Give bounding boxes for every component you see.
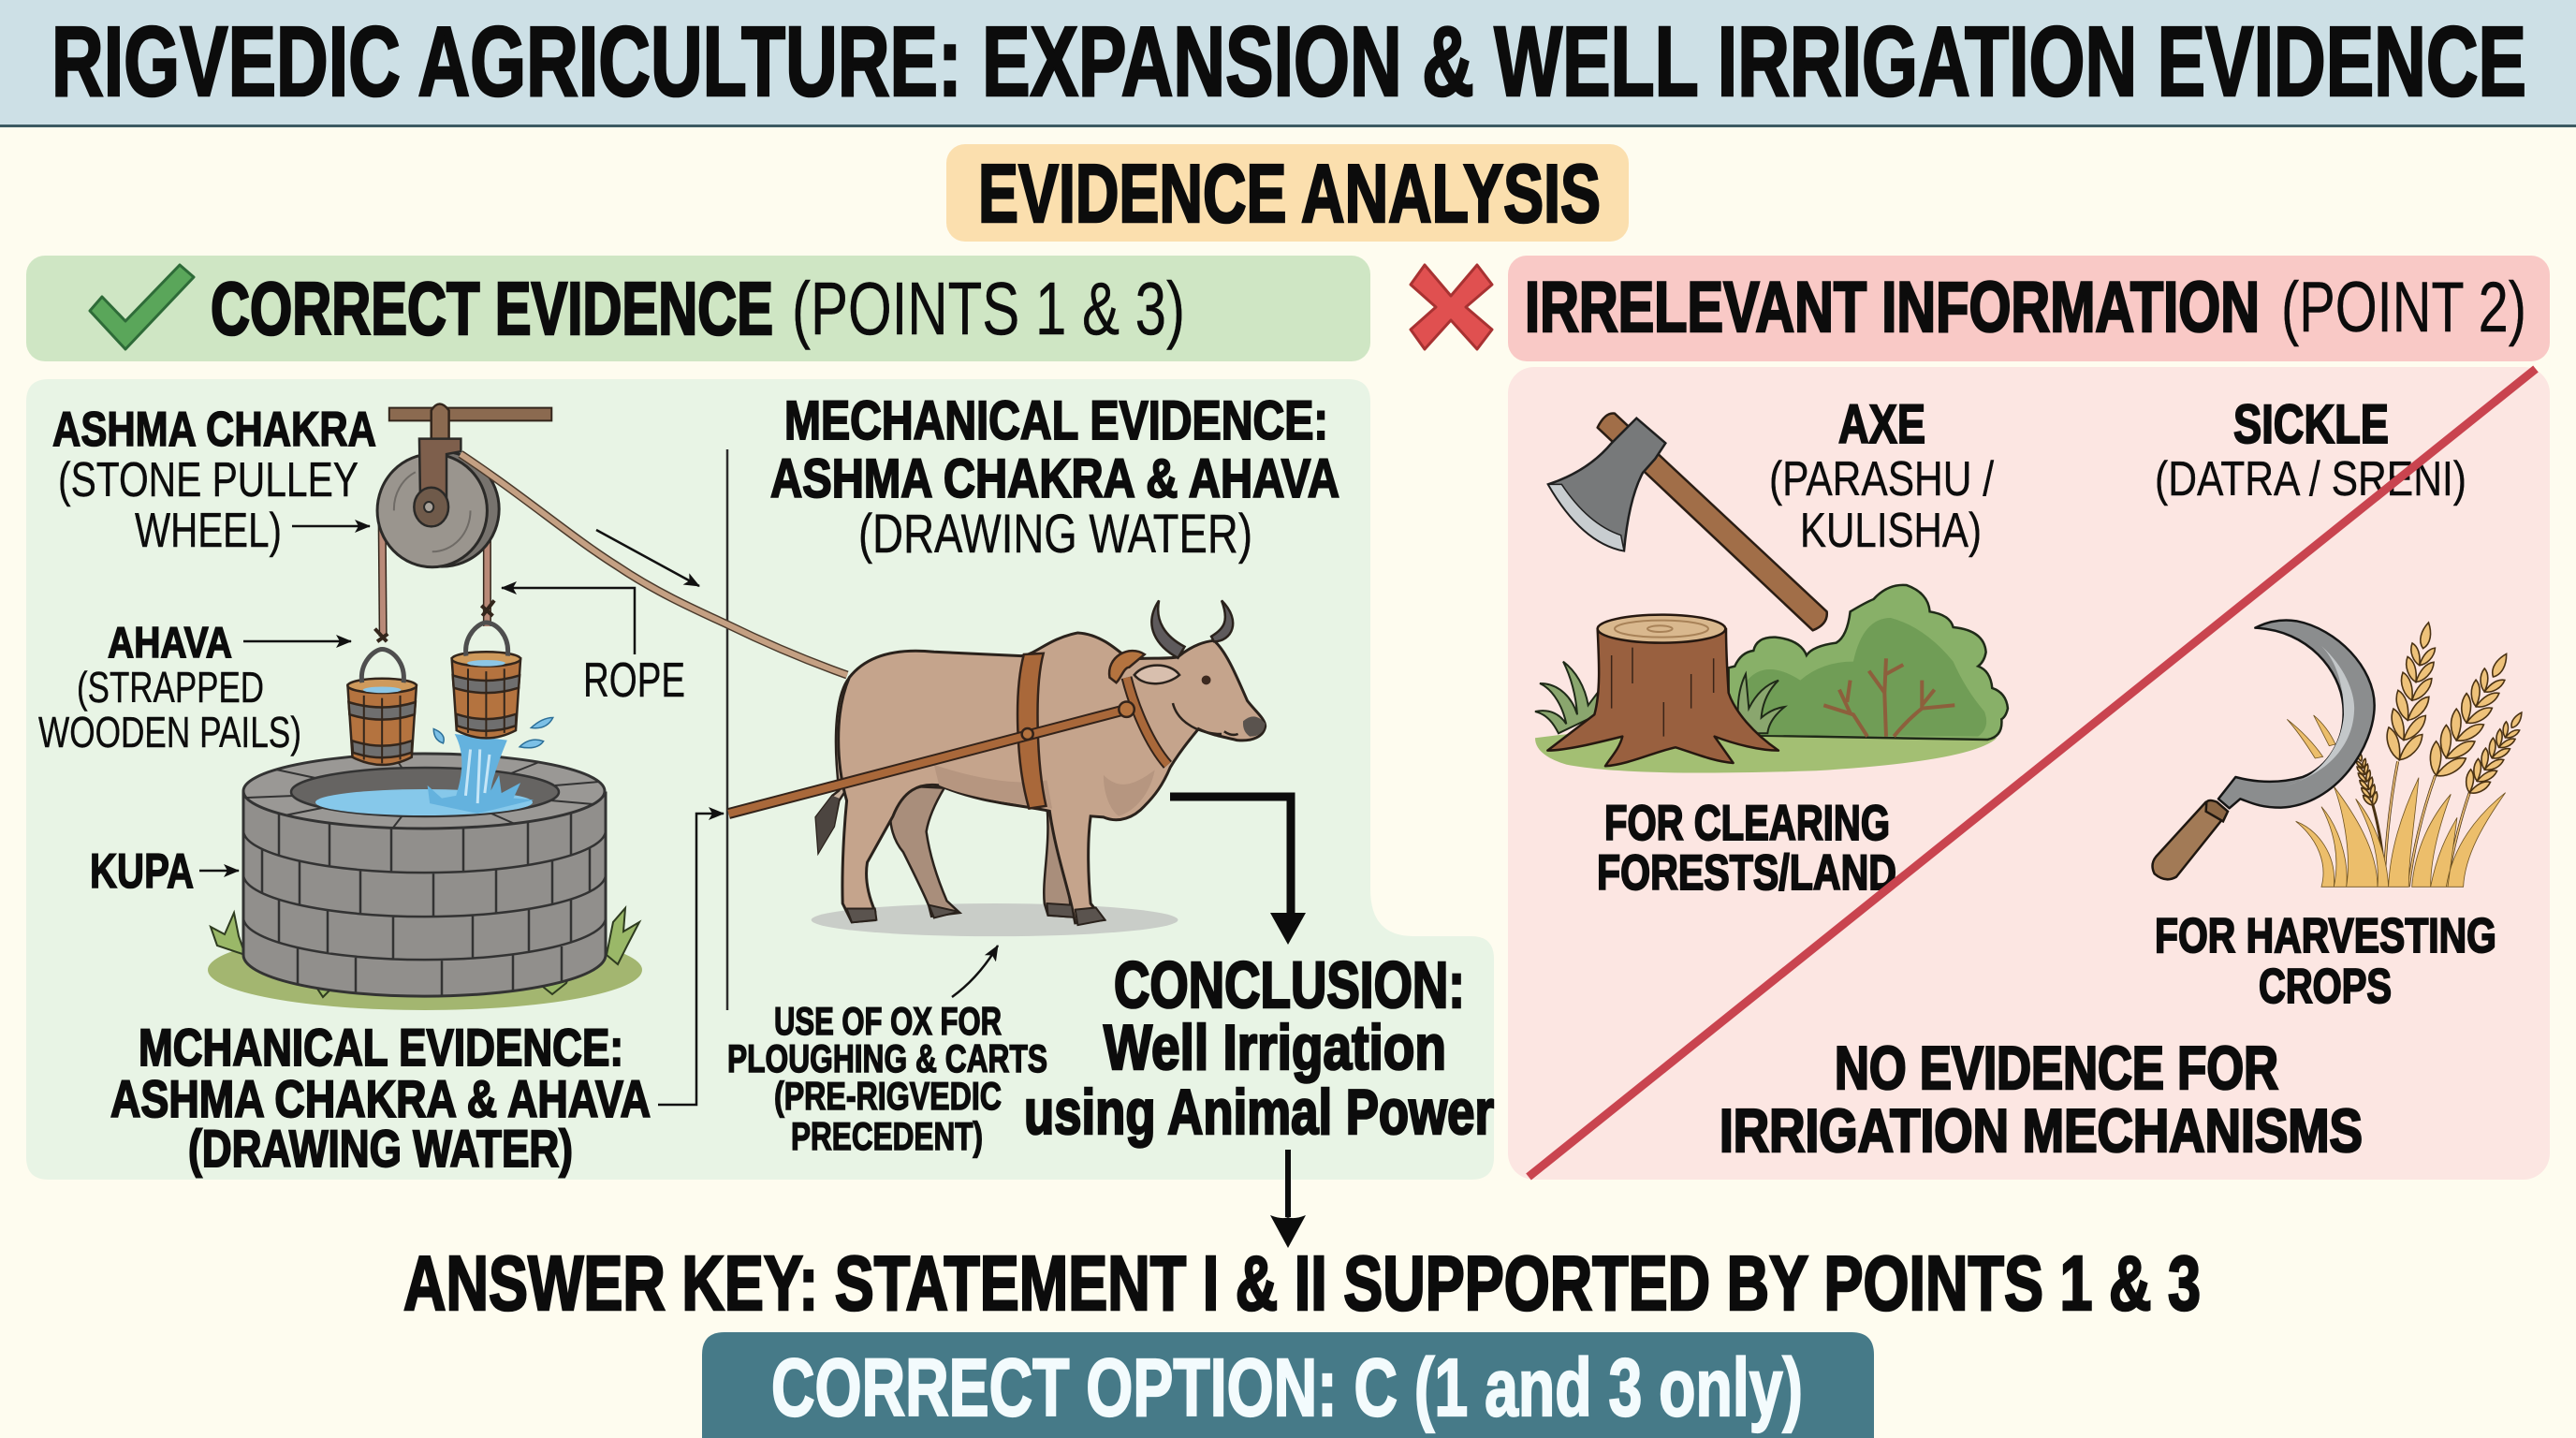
text block: mechanical evidence, right: ASHMA CHAKRA & AHAVA bbox=[770, 448, 1339, 509]
label: sickle: (DATRA / SRENI) bbox=[2155, 452, 2466, 506]
icon: green check mark bbox=[90, 265, 194, 349]
text block: no evidence: NO EVIDENCE FOR bbox=[1835, 1034, 2278, 1102]
water drops bbox=[433, 717, 553, 748]
text block: no evidence: IRRIGATION MECHANISMS bbox=[1720, 1096, 2363, 1165]
rope: right bbox=[483, 529, 491, 626]
text block: conclusion: using Animal Power bbox=[1024, 1077, 1494, 1148]
bucket: left bbox=[347, 650, 417, 765]
heading: evidence analysis: EVIDENCE ANALYSIS bbox=[978, 147, 1601, 240]
illustration: ox bbox=[728, 600, 1266, 936]
text block: use of ox bbox=[727, 999, 1047, 1158]
grass tufts bbox=[1535, 662, 1785, 733]
ox shadow bbox=[812, 903, 1178, 936]
bush bbox=[1729, 585, 2008, 740]
ox tail bbox=[816, 678, 857, 852]
ox collar bbox=[1127, 678, 1167, 765]
divider line bbox=[726, 449, 728, 1010]
wheat leaves bbox=[2287, 715, 2506, 887]
red strike-through line bbox=[1529, 369, 2536, 1177]
caption: for clearing forests bbox=[1597, 796, 1896, 901]
grass tufts bbox=[211, 908, 639, 997]
label: kupa: KUPA bbox=[90, 844, 194, 899]
label: ashma chakra bbox=[52, 403, 376, 558]
arrow: to well bbox=[199, 870, 239, 872]
text block: mechanical evidence, left: MCHANICAL EVIDENCE: bbox=[139, 1018, 623, 1077]
panel header: correct evidence bbox=[26, 256, 1370, 361]
wheat stalks bbox=[2373, 761, 2469, 887]
beam post bbox=[432, 404, 449, 441]
heading text: correct evidence: CORRECT EVIDENCE bbox=[211, 267, 773, 350]
label: axe bbox=[1769, 394, 1994, 558]
arrow: to pulley bbox=[292, 525, 370, 527]
text block: mechanical evidence, right: MECHANICAL EVIDENCE: bbox=[784, 390, 1328, 451]
icon: red cross bbox=[1411, 265, 1492, 349]
caption: for harvesting crops: CROPS bbox=[2259, 960, 2392, 1014]
axe head bbox=[1548, 418, 1665, 550]
caption: for clearing forests: FORESTS/LAND bbox=[1597, 845, 1896, 901]
pulley hub bbox=[414, 488, 448, 526]
label: ashma chakra: WHEEL) bbox=[135, 504, 282, 558]
arrow: conclusion to answer bbox=[1270, 1150, 1306, 1248]
arrow: evidence to pole bbox=[658, 814, 724, 1105]
rope knots bbox=[375, 600, 494, 641]
label: ahava: AHAVA bbox=[108, 618, 232, 667]
ox girth strap bbox=[1017, 653, 1046, 809]
ox belly shade bbox=[934, 765, 1155, 816]
text block: no evidence bbox=[1720, 1034, 2363, 1165]
label: axe: AXE bbox=[1838, 394, 1925, 455]
heading text: points 1 and 3: (POINTS 1 & 3) bbox=[792, 267, 1185, 350]
ox horns bbox=[1151, 600, 1233, 658]
text block: conclusion: Well Irrigation bbox=[1104, 1012, 1446, 1083]
illustration: sickle and wheat bbox=[2153, 619, 2531, 887]
label: ashma chakra: ASHMA CHAKRA bbox=[52, 403, 376, 457]
sickle handle bbox=[2153, 802, 2226, 879]
text block: mechanical evidence, left: (DRAWING WATER) bbox=[188, 1119, 573, 1178]
ox hooves bbox=[847, 903, 1105, 925]
text block: conclusion: CONCLUSION: bbox=[1114, 948, 1465, 1021]
pulley bracket bbox=[419, 439, 461, 498]
pulley back wheel bbox=[385, 451, 499, 566]
label: ahava: (STRAPPED bbox=[77, 663, 264, 712]
panel header: irrelevant information bbox=[1508, 256, 2550, 361]
well rim bbox=[243, 754, 605, 829]
arrow: to rope bbox=[502, 588, 635, 654]
heading text: irrelevant information: IRRELEVANT INFORMATION bbox=[1525, 268, 2260, 347]
tree stump bbox=[1547, 629, 1778, 766]
arrow: rope direction bbox=[596, 530, 699, 586]
correct option box: CORRECT OPTION: C (1 and 3 only) bbox=[771, 1343, 1803, 1433]
illustration: stone well (kupa) bbox=[208, 754, 642, 1010]
water in well bbox=[315, 789, 533, 815]
ox far hind leg bbox=[890, 785, 959, 917]
well opening bbox=[291, 768, 559, 816]
ox body bbox=[839, 633, 1266, 923]
text block: use of ox: PRECEDENT) bbox=[791, 1114, 983, 1158]
harness pole bbox=[728, 710, 1127, 814]
label: sickle: SICKLE bbox=[2233, 394, 2389, 455]
label: ahava bbox=[38, 618, 301, 756]
text block: mechanical evidence, left: ASHMA CHAKRA & AHAVA bbox=[110, 1069, 651, 1128]
ox eye bbox=[1202, 675, 1211, 684]
title banner bbox=[0, 0, 2576, 127]
main rope to ox bbox=[461, 454, 847, 675]
ox far front leg bbox=[1044, 806, 1073, 917]
panel: irrelevant information body bbox=[1508, 367, 2550, 1180]
axe handle bbox=[1598, 414, 1827, 630]
sickle blade bbox=[2218, 621, 2375, 808]
brick courses bbox=[243, 811, 606, 996]
text block: mechanical evidence, left bbox=[110, 1018, 651, 1178]
pulley front wheel bbox=[377, 454, 487, 567]
arrow: ox to conclusion bbox=[1170, 797, 1306, 945]
text block: use of ox: PLOUGHING & CARTS bbox=[727, 1036, 1047, 1080]
ground under well bbox=[208, 930, 642, 1010]
ox muzzle bbox=[1243, 716, 1266, 737]
ox ear bbox=[1134, 666, 1179, 683]
correct option box bbox=[702, 1332, 1874, 1438]
illustration: pulley, ropes and buckets bbox=[347, 404, 553, 814]
text block: mechanical evidence, right bbox=[770, 390, 1339, 565]
arrow: caption to ox bbox=[952, 946, 998, 997]
rope: left bbox=[382, 523, 383, 637]
wheat ears bbox=[2382, 619, 2446, 764]
label: ashma chakra: (STONE PULLEY bbox=[58, 453, 359, 507]
bucket: right bbox=[452, 623, 520, 738]
well cylinder bbox=[243, 793, 606, 996]
illustration: axe and stump bbox=[1535, 414, 2008, 773]
bush branches bbox=[1823, 658, 1954, 737]
text block: mechanical evidence, right: (DRAWING WATER) bbox=[858, 504, 1252, 565]
overhead beam bbox=[389, 408, 551, 420]
panel: correct evidence body bbox=[26, 379, 1494, 1180]
ground bbox=[1535, 728, 1997, 773]
label: rope: ROPE bbox=[583, 653, 685, 708]
text block: conclusion bbox=[1024, 948, 1494, 1148]
caption: for clearing forests: FOR CLEARING bbox=[1604, 796, 1890, 851]
arrow: to bucket bbox=[243, 640, 351, 642]
water stream and splash bbox=[428, 734, 534, 814]
label: axe: (PARASHU / bbox=[1769, 452, 1994, 506]
label: ahava: WOODEN PAILS) bbox=[38, 708, 301, 756]
text block: use of ox: USE OF OX FOR bbox=[774, 999, 1002, 1043]
label: axe: KULISHA) bbox=[1800, 504, 1982, 558]
caption: for harvesting crops bbox=[2155, 909, 2496, 1014]
text block: use of ox: (PRE-RIGVEDIC bbox=[774, 1074, 1002, 1118]
label: sickle bbox=[2155, 394, 2466, 506]
